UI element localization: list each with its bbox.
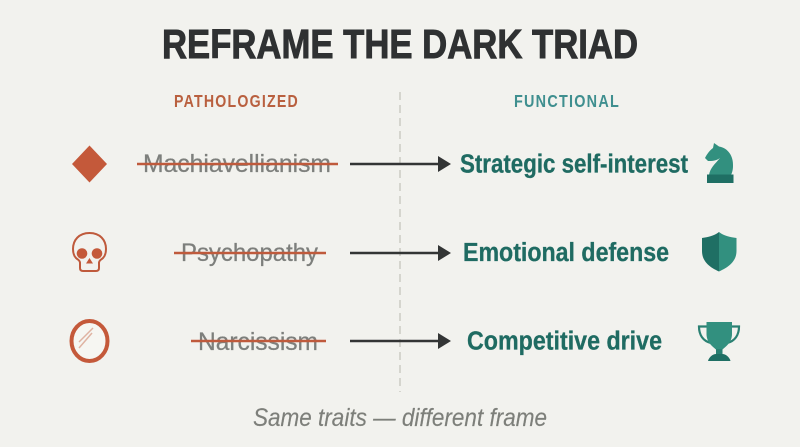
icon: chess knight	[705, 143, 734, 183]
icon: diamond	[72, 146, 107, 182]
icon: shield	[702, 232, 736, 272]
column heading: functional: FUNCTIONAL	[514, 91, 620, 111]
row 3 struck-out term: Narcissism: Narcissism	[198, 328, 318, 356]
row 1 struck-out term: Machiavellianism: Machiavellianism	[143, 150, 331, 178]
arrow: row 2	[350, 245, 451, 261]
icon: mirror	[72, 321, 108, 361]
row 1 functional term: Strategic self-interest	[460, 150, 688, 178]
row 2 functional term: Emotional defense	[463, 239, 669, 267]
arrow: row 3	[350, 333, 451, 349]
column heading: pathologized: PATHOLOGIZED	[174, 91, 299, 111]
row 2 struck-out term: Psychopathy: Psychopathy	[181, 239, 318, 267]
icon: skull	[73, 233, 106, 271]
tagline: Same traits — different frame	[253, 404, 547, 432]
title: REFRAME THE DARK TRIAD	[162, 21, 638, 67]
row 3 functional term: Competitive drive	[467, 328, 662, 356]
icon: trophy	[699, 322, 739, 361]
arrow: row 1	[350, 156, 451, 172]
